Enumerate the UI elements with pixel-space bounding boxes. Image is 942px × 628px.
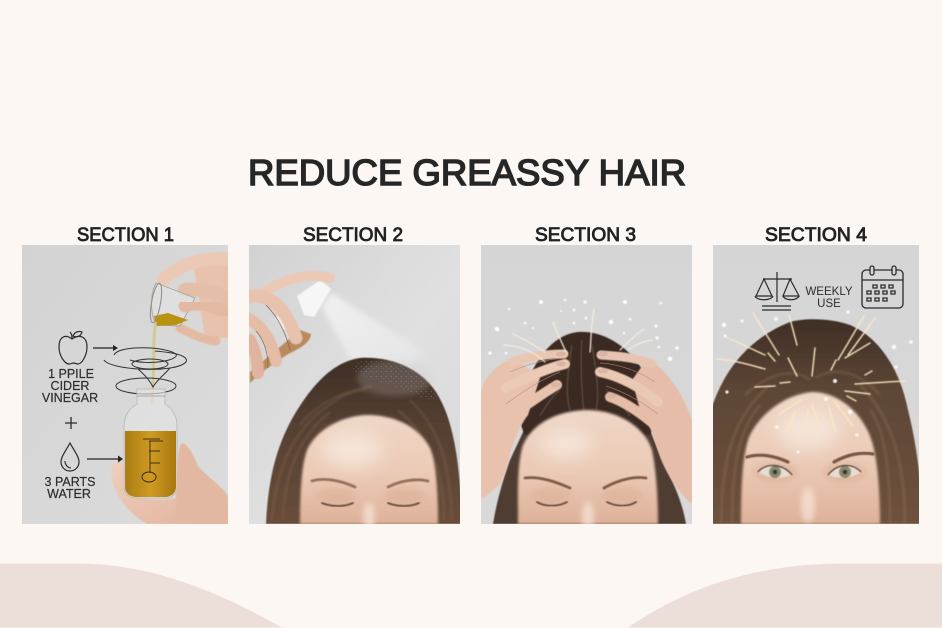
lower hand holding bottle — [111, 462, 228, 524]
closed eyes — [537, 502, 636, 506]
label: weekly use: USE — [817, 298, 841, 310]
swirl lines — [104, 348, 186, 394]
label: water — [44, 476, 95, 498]
hair — [711, 319, 922, 524]
nose highlight — [801, 487, 815, 523]
label: vinegar — [42, 368, 98, 402]
spray bottle — [275, 280, 331, 330]
label: vinegar: CIDER — [51, 379, 89, 393]
thumb over glass — [185, 304, 229, 314]
small glass of vinegar — [148, 283, 195, 326]
eyebrows — [747, 453, 873, 462]
forehead highlight — [776, 410, 840, 450]
panel: section 1 mixing vinegar and water — [22, 245, 232, 524]
label: weekly use — [805, 286, 853, 310]
eyes — [758, 466, 861, 478]
panel: section 3 massaging scalp — [481, 245, 692, 530]
hair highlights — [721, 372, 905, 524]
thumb of lower hand — [176, 444, 228, 524]
right hand — [600, 355, 692, 504]
icon: balance scale — [755, 272, 799, 310]
oil bottle behind hand — [250, 330, 311, 383]
finger gaps — [506, 358, 658, 414]
decorative curve: bottom right — [628, 564, 942, 628]
sparkle dots — [722, 310, 913, 454]
label: vinegar: VINEGAR — [42, 391, 98, 405]
light streaks — [504, 309, 652, 362]
nose highlight — [363, 502, 375, 530]
hair strands — [540, 340, 630, 416]
heading: section 3: SECTION 3 — [535, 224, 636, 246]
spray mist — [322, 294, 400, 358]
heading: section 2: SECTION 2 — [303, 224, 403, 246]
label: water: 3 PARTS — [45, 475, 95, 489]
eye shading — [534, 488, 638, 500]
closed eyes — [322, 503, 419, 506]
upper hand pouring — [163, 259, 232, 341]
fingertips — [551, 352, 616, 398]
spraying hand — [247, 276, 330, 373]
forehead highlight — [540, 429, 592, 459]
mist on hair — [352, 360, 437, 400]
icon: plus — [65, 417, 77, 429]
label: vinegar: 1 PPILE — [48, 367, 94, 381]
hair crown — [519, 332, 655, 435]
decorative curve: bottom left — [0, 564, 282, 628]
forehead highlight — [322, 432, 382, 468]
nose highlight — [582, 502, 594, 530]
forehead and face — [300, 415, 438, 524]
heading: section 1: SECTION 1 — [77, 224, 174, 246]
oil stream — [152, 322, 156, 404]
icon: water drop — [61, 443, 79, 471]
eyebrows — [312, 479, 428, 487]
bottle measuring marks — [142, 439, 163, 482]
panel: section 2 spraying onto scalp — [247, 245, 462, 530]
title: REDUCE GREASSY HAIR — [248, 152, 686, 193]
hair — [266, 358, 462, 524]
icon: apple — [59, 331, 87, 364]
left hand — [481, 354, 565, 498]
forehead and face — [518, 410, 658, 524]
arrow: water to bottle — [87, 456, 123, 462]
eyebrows — [525, 477, 646, 488]
hair highlights — [272, 386, 452, 520]
sparkles — [488, 299, 679, 361]
icon: calendar — [862, 266, 903, 308]
glass bottle — [124, 389, 177, 498]
heading: section 4: SECTION 4 — [765, 224, 867, 246]
eye shading — [320, 490, 421, 501]
label: weekly use: WEEKLY — [805, 286, 853, 298]
panel: section 4 weekly use results — [711, 245, 922, 524]
long hair at sides — [493, 430, 686, 524]
eye shading — [753, 462, 867, 482]
arrow: vinegar to swirl — [93, 345, 118, 351]
light rays — [716, 313, 905, 432]
finger creases — [256, 305, 290, 368]
forehead and face — [741, 392, 880, 524]
label: water: WATER — [47, 487, 91, 501]
